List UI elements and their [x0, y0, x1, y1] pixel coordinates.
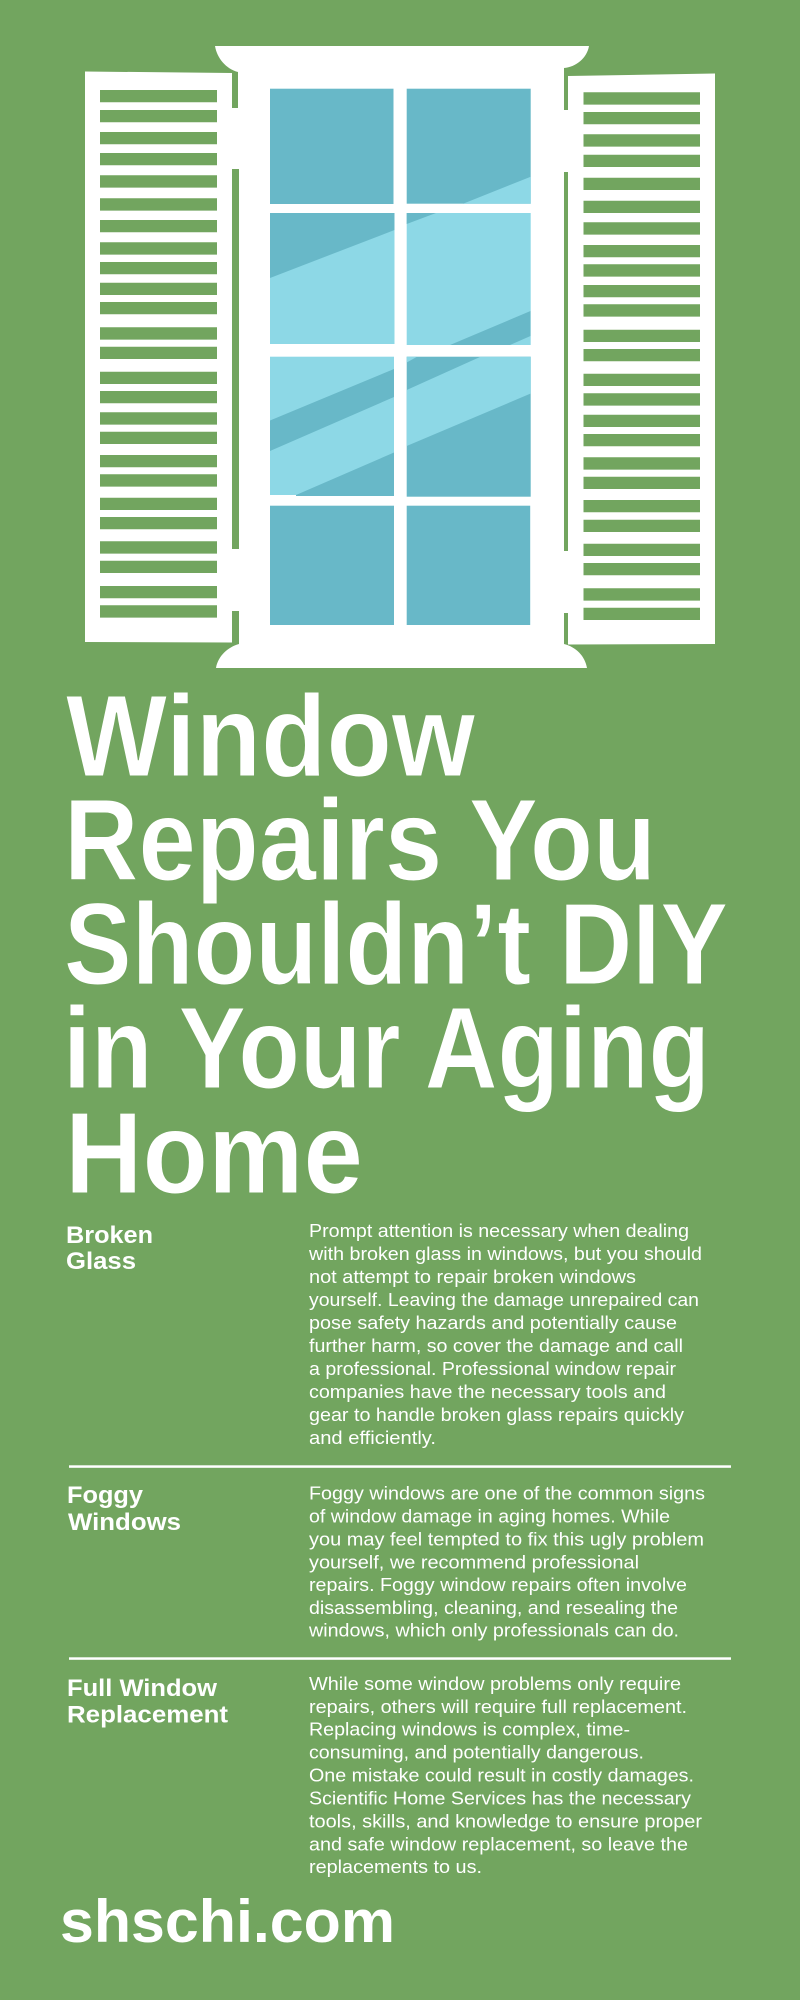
- heading: full window replacement: [67, 1675, 228, 1728]
- heading: foggy windows: Windows: [68, 1509, 181, 1536]
- heading: full window replacement: Full Window: [67, 1675, 217, 1702]
- title: [63, 671, 728, 1218]
- text block: full window replacement: replacements to us.: [309, 1856, 482, 1877]
- title: Repairs You: [64, 775, 656, 905]
- heading: foggy windows: [67, 1482, 181, 1536]
- text block: broken glass: yourself. Leaving the damage unrepaired can: [309, 1289, 699, 1310]
- text block: full window replacement: One mistake could result in costly damages.: [309, 1765, 694, 1786]
- text block: foggy windows: disassembling, cleaning, and resealing the: [309, 1597, 678, 1618]
- text block: foggy windows: Foggy windows are one of the common signs: [309, 1483, 705, 1504]
- text block: foggy windows: repairs. Foggy window repairs often involve: [309, 1574, 687, 1595]
- text block: full window replacement: Replacing windows is complex, time-: [309, 1718, 630, 1740]
- text block: broken glass: with broken glass in windows, but you should: [308, 1243, 702, 1264]
- text block: broken glass: further harm, so cover the damage and call: [309, 1335, 683, 1356]
- text block: full window replacement: While some window problems only require: [309, 1673, 681, 1694]
- title: Window: [66, 671, 476, 801]
- window frame: [215, 46, 589, 668]
- text block: broken glass: pose safety hazards and potentially cause: [309, 1312, 677, 1333]
- right shutter: [568, 74, 715, 644]
- title: Home: [65, 1088, 363, 1218]
- text block: full window replacement: and safe window replacement, so leave the: [309, 1834, 688, 1854]
- text block: broken glass: [308, 1220, 702, 1448]
- glass panes: [270, 89, 531, 625]
- text block: broken glass: gear to handle broken glass repairs quickly: [309, 1404, 685, 1425]
- text block: full window replacement: Scientific Home Services has the necessary: [309, 1788, 692, 1808]
- text block: full window replacement: consuming, and potentially dangerous.: [309, 1742, 644, 1762]
- section: foggy windows: [67, 1482, 705, 1641]
- title: in Your Aging: [63, 983, 710, 1113]
- text block: full window replacement: repairs, others will require full replacement.: [309, 1696, 687, 1717]
- text block: foggy windows: of window damage in aging homes. While: [309, 1506, 670, 1527]
- text block: broken glass: not attempt to repair broken windows: [309, 1266, 636, 1287]
- heading: broken glass: [66, 1222, 153, 1275]
- text block: broken glass: Prompt attention is necessary when dealing: [309, 1220, 689, 1241]
- text block: foggy windows: you may feel tempted to fix this ugly problem: [309, 1529, 704, 1550]
- illustration: window with shutters: [85, 46, 715, 668]
- text block: full window replacement: [309, 1673, 702, 1877]
- section: full window replacement: [67, 1673, 702, 1877]
- text block: broken glass: a professional. Professional window repair: [309, 1358, 676, 1379]
- website url: shschi.com: [60, 1888, 395, 1955]
- section: broken glass: [66, 1220, 702, 1448]
- text block: broken glass: and efficiently.: [309, 1427, 436, 1448]
- text block: foggy windows: windows, which only professionals can do.: [308, 1620, 679, 1641]
- divider line: [69, 1465, 731, 1468]
- heading: broken glass: Glass: [66, 1248, 136, 1275]
- heading: full window replacement: Replacement: [67, 1701, 228, 1728]
- heading: foggy windows: Foggy: [67, 1482, 144, 1509]
- divider line: [69, 1657, 731, 1660]
- left shutter: [85, 72, 232, 642]
- heading: broken glass: Broken: [66, 1222, 153, 1249]
- text block: broken glass: companies have the necessary tools and: [309, 1381, 666, 1402]
- text block: foggy windows: [308, 1483, 705, 1641]
- text block: full window replacement: tools, skills, and knowledge to ensure proper: [309, 1811, 702, 1832]
- text block: foggy windows: yourself, we recommend professional: [309, 1552, 639, 1573]
